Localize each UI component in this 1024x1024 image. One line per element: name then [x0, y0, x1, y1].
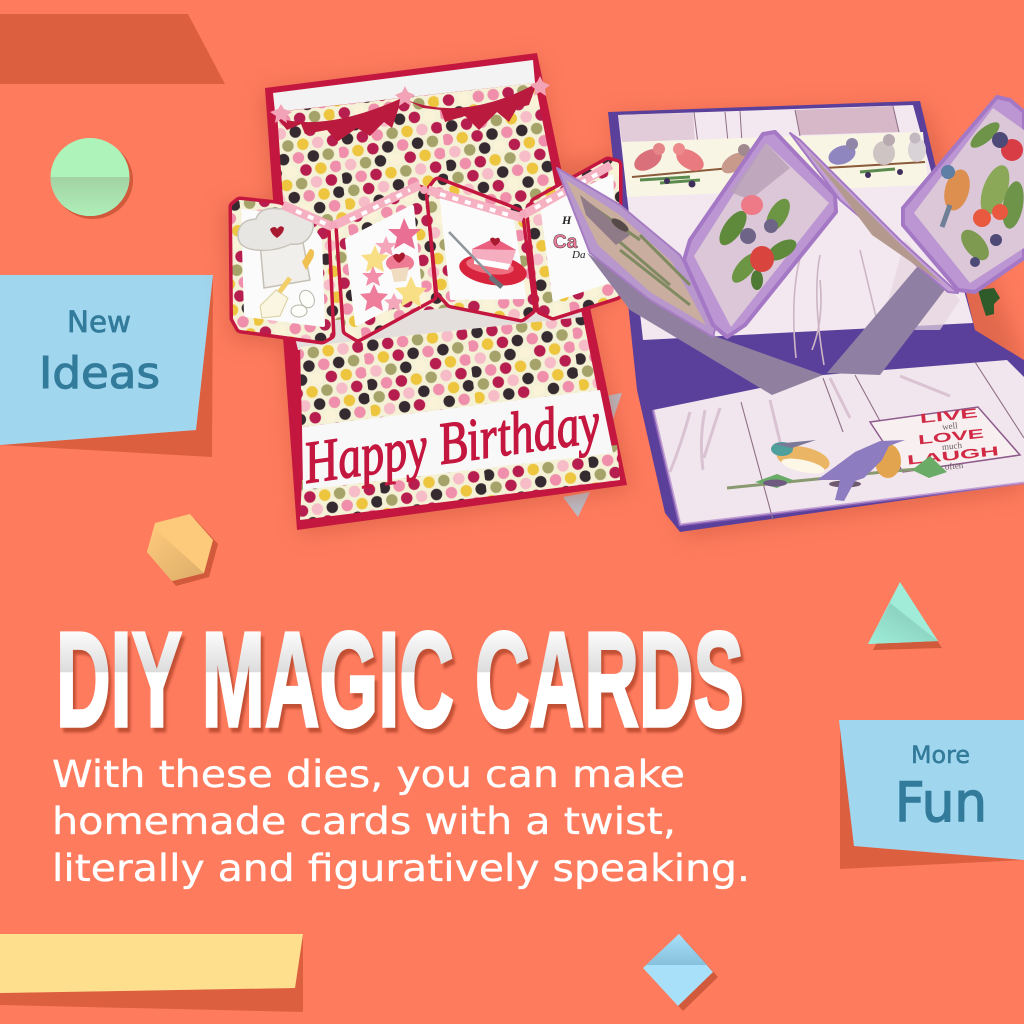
lower dot panel [300, 317, 598, 427]
panel 4: congratulations tag [532, 163, 616, 314]
soft card shadows [222, 58, 1024, 538]
bottom dot strip [300, 445, 620, 520]
purple twist card base [608, 101, 1024, 532]
sentiment plaque: LIVE [919, 405, 979, 426]
text: More: More [911, 741, 970, 769]
icon: green folded circle [50, 138, 133, 219]
sentiment plaque [870, 403, 1020, 476]
top white strip [273, 60, 535, 112]
accordion panels on red card [235, 163, 616, 338]
text: Happy Birthday: Happy Birthday [299, 389, 604, 496]
sentiment plaque: well [942, 420, 959, 432]
icon: teal folded triangle [868, 582, 942, 650]
panel: middle side [790, 133, 958, 293]
body text: With these dies, you can make [52, 753, 685, 796]
top-left dark ribbon [0, 14, 225, 84]
body text: literally and figuratively speaking. [52, 847, 750, 890]
body text: homemade cards with a twist, [52, 800, 676, 843]
panel: bird and flowers [903, 97, 1024, 292]
icon: orange folded hexagon [147, 514, 218, 586]
sentiment plaque: LAUGH [906, 443, 999, 468]
callout: More Fun note [839, 720, 1024, 869]
icon: pink birds [631, 143, 750, 178]
icon: rose bouquet [714, 195, 800, 290]
icon: blue birds [826, 132, 926, 168]
panel: roses [684, 132, 836, 337]
panel 3: cake slice [431, 183, 530, 316]
text: Ideas: Ideas [39, 348, 160, 399]
red party card [265, 53, 627, 530]
body text [52, 753, 750, 890]
yellow note [0, 934, 303, 1012]
fold shadow [292, 293, 583, 350]
upper woodgrain panel [618, 105, 973, 365]
icon: blue folded diamond [643, 934, 718, 1011]
text: partial card wording: Ca [553, 232, 578, 253]
title [56, 604, 747, 760]
lower birds on branch [727, 440, 947, 501]
panel 1: chef hat [235, 203, 329, 338]
right grey strut [827, 267, 947, 375]
icon: cake on plate [449, 232, 529, 290]
callout: New Ideas note [0, 275, 213, 457]
grey triangles behind red card [563, 393, 622, 517]
birthday white panel [302, 390, 613, 490]
icon: cupcake and stars [360, 218, 427, 311]
text: partial card wording [553, 213, 586, 261]
icon: chef hat [238, 207, 317, 318]
left grey strut [587, 253, 823, 395]
panel: birdhouse side [557, 168, 717, 337]
lower woodgrain panel [653, 360, 1024, 525]
lace ribbons [283, 165, 611, 229]
text: partial card wording: H [561, 213, 572, 227]
card base [265, 53, 627, 530]
bunting [270, 76, 550, 142]
panel 2: cupcake and stars [341, 190, 431, 336]
sentiment plaque: LOVE [917, 426, 985, 447]
icon: leaf [978, 288, 1000, 316]
text: New: New [67, 305, 131, 339]
sentiment plaque: often [944, 460, 964, 472]
icon: bird with flowers [940, 118, 1024, 267]
purple twist pop-up [557, 97, 1024, 395]
upper dot panel [277, 83, 578, 332]
sentiment plaque: much [941, 440, 963, 452]
text: partial card wording: Da [571, 249, 586, 261]
text: Fun: Fun [895, 771, 987, 834]
bird border strip [622, 132, 928, 197]
